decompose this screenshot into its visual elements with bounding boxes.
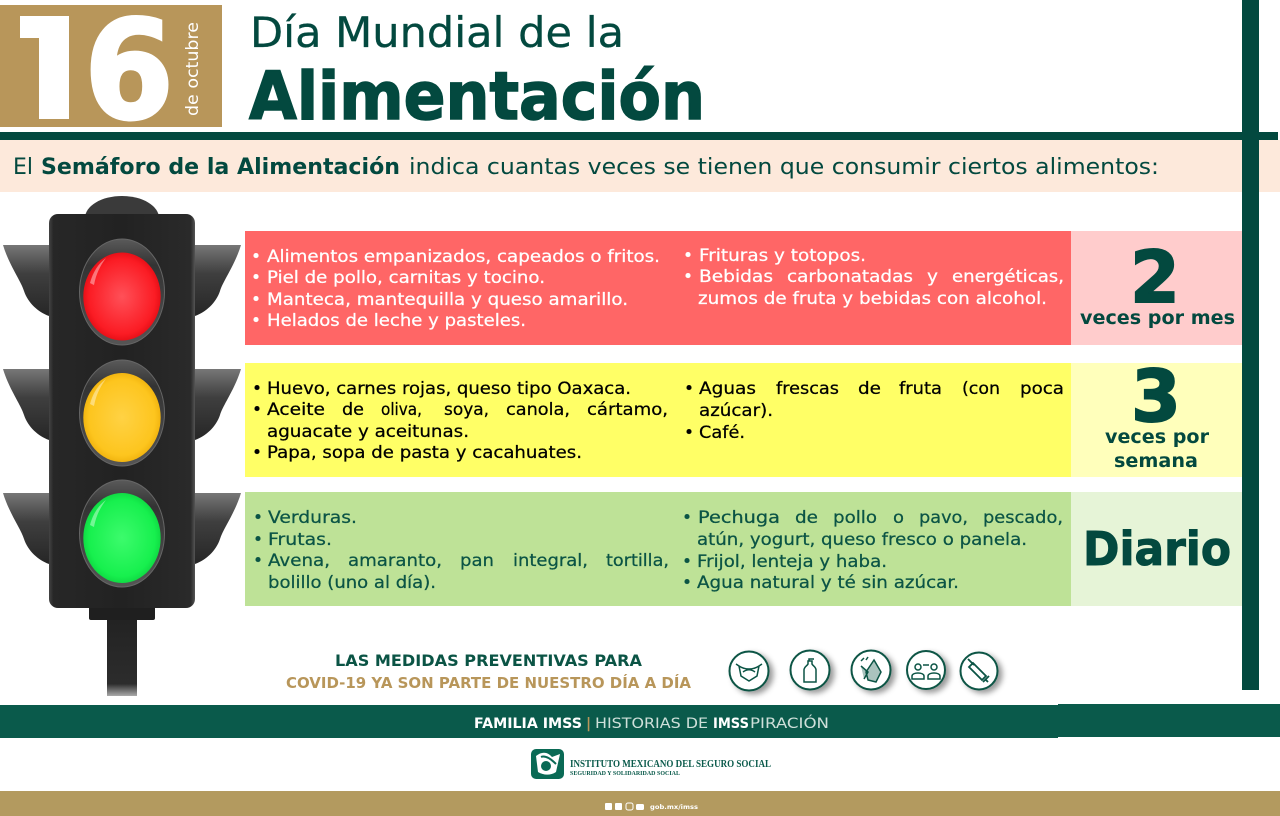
yellow foods left: de bbox=[342, 400, 364, 420]
frequency: 3 veces por semana: semana bbox=[1114, 450, 1198, 472]
icon: social distance bbox=[907, 651, 945, 689]
yellow foods right: azúcar). bbox=[699, 401, 773, 421]
title: Alimentación bbox=[249, 58, 705, 135]
yellow foods right: frescas bbox=[776, 379, 839, 399]
prevention icons bbox=[730, 650, 998, 690]
frequency: 2 veces por mes: 2 bbox=[1130, 236, 1180, 319]
footer band: | bbox=[586, 716, 591, 732]
yellow foods right: poca bbox=[1020, 379, 1064, 399]
title: Día Mundial de la bbox=[250, 8, 624, 57]
icon: hand washing bbox=[852, 650, 890, 690]
green foods right: Frijol, lenteja y haba. bbox=[697, 552, 887, 572]
red foods right: • bbox=[683, 267, 693, 287]
date month: de octubre bbox=[183, 22, 203, 116]
footer band: PIRACIÓN bbox=[750, 714, 829, 732]
red foods left: Manteca, mantequilla y queso amarillo. bbox=[267, 290, 628, 310]
red foods left: • bbox=[251, 311, 261, 331]
green foods left: • bbox=[253, 508, 263, 528]
frequency: 2 veces por mes: veces por mes bbox=[1080, 307, 1235, 329]
red foods right bbox=[683, 246, 1064, 309]
visors bbox=[3, 245, 241, 564]
date number bbox=[20, 15, 168, 122]
red foods left bbox=[251, 247, 660, 331]
red foods right: zumos de fruta y bebidas con alcohol. bbox=[698, 289, 1047, 309]
frequency: diario bbox=[1071, 492, 1242, 606]
bottom gold band: gob.mx/imss bbox=[650, 803, 698, 811]
green foods left bbox=[253, 508, 669, 593]
traffic light illustration bbox=[3, 196, 241, 696]
green foods left: amaranto, bbox=[348, 551, 442, 571]
red foods right: • bbox=[683, 246, 693, 266]
covid message: COVID-19 YA SON PARTE DE NUESTRO DÍA A DÍA bbox=[286, 673, 691, 692]
yellow lamp bbox=[80, 360, 164, 466]
subtitle band: El bbox=[13, 155, 33, 180]
yellow foods left: • bbox=[252, 379, 262, 399]
yellow foods left bbox=[252, 379, 668, 463]
red foods left: Piel de pollo, carnitas y tocino. bbox=[267, 268, 545, 288]
green foods left: pan bbox=[460, 551, 494, 571]
green foods left: Frutas. bbox=[268, 530, 332, 550]
yellow foods left: cártamo, bbox=[587, 400, 668, 420]
green foods right: pollo bbox=[833, 508, 877, 528]
green foods left: Avena, bbox=[268, 551, 330, 571]
frequency: 3 veces por semana: 3 bbox=[1131, 355, 1181, 438]
green foods right: • bbox=[682, 508, 692, 528]
yellow foods right: • bbox=[684, 379, 694, 399]
red foods left: • bbox=[251, 268, 261, 288]
green foods left: Verduras. bbox=[268, 508, 357, 528]
green foods right: • bbox=[682, 573, 692, 593]
red foods left: Helados de leche y pasteles. bbox=[267, 311, 526, 331]
yellow foods right: Aguas bbox=[699, 379, 756, 399]
panel: green row bbox=[245, 492, 1242, 606]
yellow foods right: • bbox=[684, 423, 694, 443]
green foods left: tortilla, bbox=[606, 551, 669, 571]
icons: social media bbox=[605, 803, 644, 810]
pole bbox=[107, 615, 137, 696]
yellow foods right: de bbox=[858, 379, 881, 399]
frequency: 2 veces por mes bbox=[1071, 231, 1242, 345]
red foods right: carbonatadas bbox=[787, 267, 913, 287]
red foods right: y bbox=[927, 267, 938, 287]
red foods left: • bbox=[251, 290, 261, 310]
green foods right: Pechuga bbox=[698, 508, 780, 528]
yellow foods left: aguacate y aceitunas. bbox=[267, 422, 469, 442]
right vertical bar bbox=[1242, 0, 1259, 690]
yellow foods left: • bbox=[252, 443, 262, 463]
green foods right bbox=[682, 508, 1063, 593]
yellow foods left: Aceite bbox=[267, 400, 325, 420]
green foods left: integral, bbox=[513, 551, 588, 571]
date badge bbox=[0, 5, 222, 127]
subtitle band: Semáforo de la Alimentación bbox=[41, 155, 400, 180]
IMSS logo: INSTITUTO MEXICANO DEL SEGURO SOCIAL bbox=[570, 759, 771, 770]
yellow foods left: Papa, sopa de pasta y cacahuates. bbox=[267, 443, 582, 463]
yellow foods left: canola, bbox=[506, 400, 570, 420]
icon: sanitizer bottle bbox=[790, 650, 830, 690]
red foods right: Bebidas bbox=[699, 267, 773, 287]
bottom gold band bbox=[0, 791, 1280, 816]
IMSS logo: SEGURIDAD Y SOLIDARIDAD SOCIAL bbox=[570, 771, 680, 777]
frequency: 3 veces por semana bbox=[1071, 355, 1242, 477]
green foods right: o bbox=[893, 508, 904, 528]
icon: face mask bbox=[730, 652, 768, 690]
footer band: FAMILIA IMSS bbox=[474, 716, 582, 732]
subtitle band: indica cuantas veces se tienen que consumir ciertos alimentos: bbox=[409, 155, 1159, 180]
yellow foods left: Huevo, carnes rojas, queso tipo Oaxaca. bbox=[267, 379, 631, 399]
yellow foods left: oliva, bbox=[381, 400, 422, 420]
red foods left: Alimentos empanizados, capeados o fritos. bbox=[267, 247, 660, 267]
yellow foods left: • bbox=[252, 400, 262, 420]
green foods left: • bbox=[253, 551, 263, 571]
green foods right: Agua natural y té sin azúcar. bbox=[697, 573, 959, 593]
green foods right: pavo, bbox=[919, 508, 968, 528]
green foods right: • bbox=[682, 552, 692, 572]
red lamp bbox=[80, 239, 164, 345]
covid message: LAS MEDIDAS PREVENTIVAS PARA bbox=[335, 651, 643, 670]
icon: IMSS emblem bbox=[531, 749, 564, 779]
yellow foods right: (con bbox=[962, 379, 1000, 399]
yellow foods right bbox=[684, 379, 1064, 443]
green lamp bbox=[80, 480, 164, 587]
green foods right: atún, yogurt, queso fresco o panela. bbox=[697, 530, 1027, 550]
footer band bbox=[0, 704, 1280, 738]
red foods left: • bbox=[251, 247, 261, 267]
panel: yellow row bbox=[245, 355, 1242, 477]
green foods left: • bbox=[253, 530, 263, 550]
footer band: HISTORIAS DE bbox=[595, 716, 708, 732]
yellow foods right: Café. bbox=[699, 423, 745, 443]
green foods right: pescado, bbox=[983, 508, 1063, 528]
yellow foods left: soya, bbox=[444, 400, 489, 420]
icon: syringe bbox=[960, 652, 998, 690]
yellow foods right: fruta bbox=[899, 379, 942, 399]
subtitle band bbox=[0, 140, 1280, 192]
frequency: 3 veces por semana: veces por bbox=[1105, 426, 1210, 448]
footer band: IMSS bbox=[713, 716, 749, 732]
header rule bbox=[0, 132, 1278, 140]
panel: red row bbox=[245, 231, 1242, 345]
red foods right: energéticas, bbox=[952, 267, 1064, 287]
green foods right: de bbox=[795, 508, 818, 528]
covid message bbox=[286, 651, 691, 692]
IMSS logo bbox=[531, 749, 771, 779]
title bbox=[249, 8, 705, 135]
green foods left: bolillo (uno al día). bbox=[268, 573, 436, 593]
red foods right: Frituras y totopos. bbox=[699, 246, 866, 266]
frequency: diario: Diario bbox=[1083, 522, 1231, 576]
